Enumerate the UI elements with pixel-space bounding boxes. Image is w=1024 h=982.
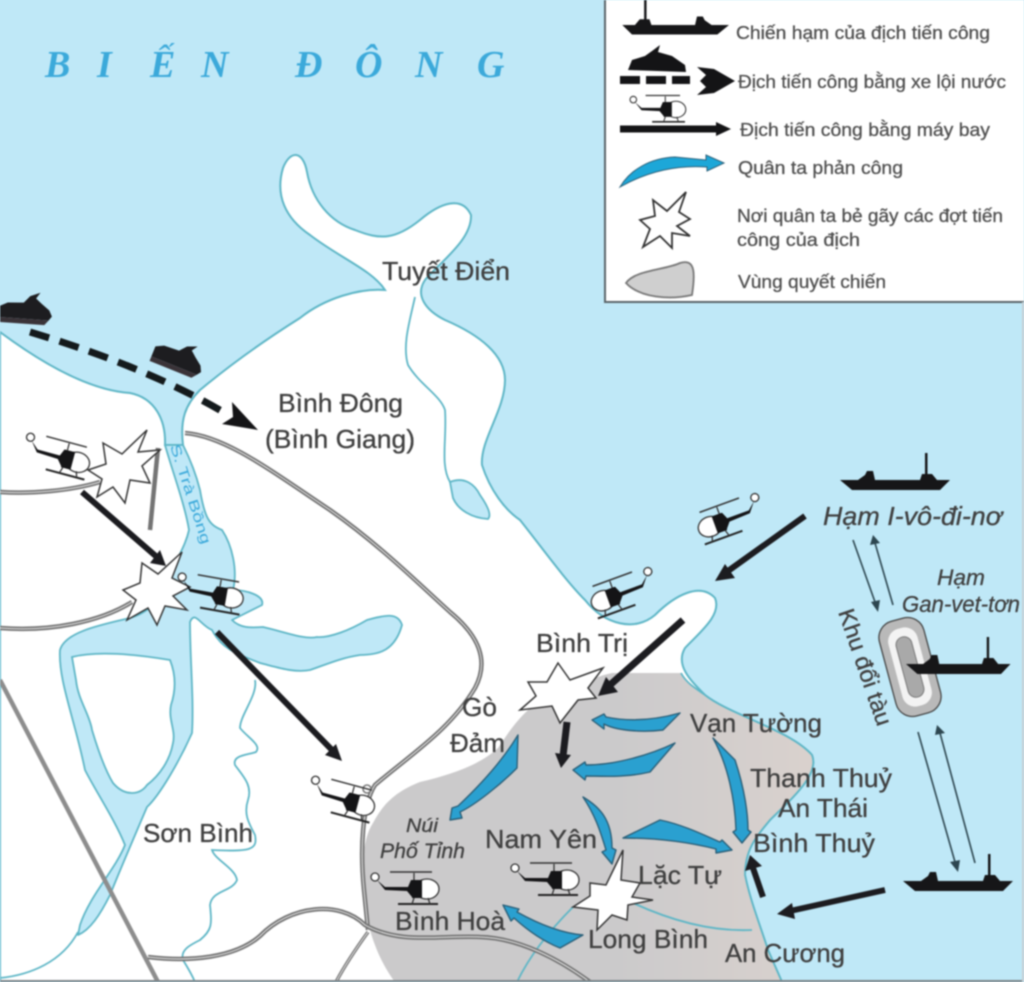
- legend: warship label: Chiến hạm của địch tiến công: [736, 23, 990, 43]
- explosion: Bình Trị: [520, 663, 603, 723]
- blue counter-attack arrows: [450, 713, 751, 948]
- combat zone (vùng quyết chiến): [362, 673, 813, 982]
- helicopters: [20, 431, 768, 904]
- explosion: Lặc Tự: [573, 850, 653, 930]
- place labels: Gò: [462, 692, 497, 722]
- place labels: Gan-vet-tơn: [902, 591, 1020, 617]
- place labels: Bình Trị: [536, 628, 628, 658]
- place labels: Lặc Tự: [638, 860, 722, 890]
- black attack arrows: [82, 492, 885, 919]
- dashed amphibious attack arrow: [30, 332, 258, 430]
- place labels: Bình Thuỷ: [753, 828, 875, 858]
- place labels: Phố Tỉnh: [380, 840, 465, 863]
- place labels: Hạm: [937, 565, 985, 590]
- explosion: river: [123, 552, 190, 625]
- place labels: Thanh Thuỷ: [750, 763, 892, 793]
- image edge lines: [0, 302, 1024, 982]
- coast segment over combat zone: [517, 673, 813, 982]
- place labels: Núi: [406, 816, 439, 837]
- legend: explosion label: công của địch: [737, 230, 860, 250]
- stream through Sơn Bình: [182, 680, 257, 982]
- ship: Hạm Gan-vet-tơn: [906, 637, 1010, 674]
- place labels: An Thái: [778, 793, 868, 823]
- legend panel: [605, 0, 1024, 302]
- legend: amphibious vehicle label: Địch tiến công bằng xe lội nước: [738, 71, 1006, 92]
- ship: Hạm I-vô-đi-nơ: [840, 453, 950, 490]
- place labels: Đảm: [450, 728, 505, 758]
- legend: warship icon: [622, 0, 729, 35]
- ship: south-east: [903, 854, 1013, 891]
- legend: amphibious vehicle icon: [620, 45, 735, 95]
- legend: explosion icon: [640, 192, 690, 248]
- amphibious vehicle top left: [0, 290, 53, 326]
- place labels: [143, 256, 1020, 968]
- title: Biển Đông: BIẾNĐÔNG: [44, 43, 505, 86]
- legend: combat zone label: Vùng quyết chiến: [738, 272, 886, 292]
- legend: counter-attack arrow icon: [620, 155, 724, 187]
- land mass: [0, 155, 813, 982]
- river: Sông Trà Bồng and branches: [0, 445, 402, 978]
- lagoon on Tuyết Điển peninsula: [406, 297, 489, 519]
- place labels: S. Trà Bồng: [167, 442, 215, 546]
- ship: Hạm Gan-vet-tơn shuttle zone: [875, 614, 945, 720]
- legend: counter-attack label: Quân ta phản công: [738, 158, 903, 178]
- place labels: Sơn Bình: [143, 818, 253, 848]
- place labels: Bình Hoà: [395, 906, 506, 936]
- roads: [0, 433, 590, 982]
- legend: helicopter and arrow icon: [620, 96, 731, 136]
- place labels: An Cương: [725, 938, 845, 968]
- legend: explosion label: Nơi quân ta bẻ gãy các đợt tiến: [737, 206, 1003, 226]
- place labels: Khu đổi tàu: [833, 605, 898, 729]
- thin shuttle arrows: [853, 535, 975, 872]
- place labels: Tuyết Điển: [382, 256, 510, 286]
- explosion: north-west: [88, 430, 160, 503]
- place labels: Hạm I-vô-đi-nơ: [823, 501, 1004, 531]
- place labels: Bình Đông: [278, 388, 403, 418]
- legend: air attack label: Địch tiến công bằng máy bay: [740, 119, 990, 140]
- place labels: Nam Yên: [485, 824, 597, 854]
- amphibious vehicle near river mouth: [150, 332, 209, 380]
- place labels: Vạn Tường: [690, 708, 822, 738]
- legend: combat zone icon: [626, 262, 694, 297]
- place labels: Long Bình: [588, 924, 708, 954]
- place labels: (Bình Giang): [265, 424, 415, 454]
